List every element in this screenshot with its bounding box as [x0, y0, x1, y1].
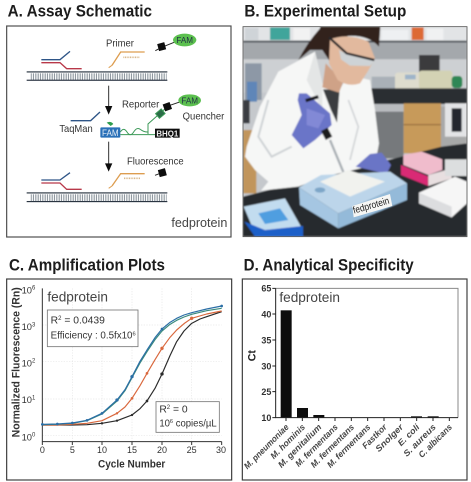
- y axis labels: 10: [22, 322, 32, 332]
- pipette: [306, 97, 345, 176]
- y axis labels: 10: [22, 395, 32, 405]
- x axis species labels: M. fermentans: [293, 422, 340, 469]
- copies box: 6: [170, 419, 173, 425]
- x axis species labels: Fastkor: [360, 422, 389, 451]
- right gloved hand: [356, 153, 391, 174]
- quencher fragment: [155, 168, 167, 177]
- face: [329, 36, 375, 85]
- y axis labels: 10: [22, 432, 32, 442]
- orange primer bottom: [109, 174, 145, 188]
- y axis labels: [261, 284, 271, 423]
- fluorescence label: Fluorescence: [127, 157, 184, 168]
- FAM block: FAM: [102, 128, 119, 138]
- panel A: assay schematic: [7, 1, 231, 237]
- y axis title: Normalized Fluorescence (Rn): [10, 287, 22, 437]
- x axis title: Cycle Number: [98, 459, 166, 471]
- y axis labels: 1: [32, 395, 36, 401]
- primer label: Primer: [106, 39, 135, 50]
- y axis labels: 6: [32, 286, 36, 292]
- panel C frame: [7, 279, 232, 480]
- y axis labels: 2: [32, 359, 36, 365]
- x axis labels: 10: [97, 445, 107, 455]
- x axis species labels: M. hominis: [268, 422, 307, 461]
- orange primer top: [109, 52, 145, 68]
- x axis species labels: M. genitalium: [276, 422, 324, 470]
- DNA strand bottom: [27, 192, 167, 202]
- panel D: analytical specificity: [242, 256, 467, 480]
- x axis labels: 0: [40, 445, 45, 455]
- panel D frame: [242, 279, 467, 480]
- y axis labels: 35: [261, 335, 271, 345]
- lab background: [243, 27, 467, 198]
- copies box: [156, 402, 219, 432]
- copies box: R: [159, 405, 167, 416]
- x axis labels: 15: [127, 445, 137, 455]
- panel C: amplification plots: [7, 256, 232, 480]
- blue tube rack: [244, 198, 303, 237]
- R squared and efficiency box: R: [51, 316, 58, 327]
- x axis species labels: C. albicans: [416, 422, 454, 460]
- curve markers: [41, 305, 223, 426]
- x axis labels: 5: [70, 445, 75, 455]
- axes and ticks: [272, 288, 458, 421]
- R squared and efficiency box: Efficiency : 0.5fx10: [51, 331, 132, 342]
- x axis species labels: M. fermentans: [308, 422, 356, 470]
- probe helix and reporter: [120, 101, 182, 135]
- lab coat: [245, 52, 379, 191]
- reporter label: Reporter: [122, 99, 160, 110]
- heading B: B. Experimental Setup: [244, 1, 406, 20]
- lab photograph illustration: [243, 27, 467, 237]
- x axis species labels: M. pneumoniae: [242, 422, 291, 471]
- amplification curves: [42, 306, 222, 425]
- ponytail and hair: [298, 27, 380, 62]
- reporter FAM tag: FAM: [181, 95, 198, 105]
- copies box: 2: [167, 405, 171, 411]
- top primer pair: [41, 51, 82, 69]
- y axis labels: 25: [261, 387, 271, 397]
- arrow down 1: [105, 86, 112, 115]
- blue foam box: [299, 172, 407, 213]
- y axis labels: 65: [261, 284, 271, 294]
- x axis species labels: M. fermentans: [325, 422, 373, 470]
- photo frame: [243, 27, 467, 237]
- y axis title: Ct: [246, 350, 258, 361]
- x axis species labels: E. coli: [395, 422, 422, 448]
- watermark D: fedprotein: [279, 290, 340, 305]
- bar chart: [281, 310, 439, 418]
- heading C: C. Amplification Plots: [9, 256, 165, 275]
- FAM probe top: [155, 34, 196, 51]
- x axis species labels: S. aureus: [401, 422, 438, 459]
- TaqMan probe line: [71, 112, 100, 121]
- R squared and efficiency box: [47, 310, 138, 347]
- y axis labels: 10: [22, 358, 32, 368]
- FAM block: [100, 122, 120, 138]
- reporter FAM tag: [163, 94, 201, 111]
- plot frame: [276, 288, 458, 418]
- x axis labels: 30: [216, 445, 226, 455]
- FAM probe top: FAM: [176, 35, 193, 45]
- y axis labels: 10: [261, 413, 271, 423]
- grid lines: [42, 288, 222, 442]
- quencher label: Quencher: [183, 111, 225, 122]
- panel B: experimental setup: [243, 1, 467, 237]
- fedprotein label on box: fedprotein: [352, 196, 391, 217]
- safety goggles: [329, 37, 374, 66]
- x axis labels: 20: [157, 445, 167, 455]
- x axis species labels: Snolger: [373, 422, 406, 454]
- panel A frame: [7, 26, 231, 237]
- y axis labels: 3: [32, 322, 36, 328]
- watermark C: fedprotein: [47, 290, 108, 305]
- axes: [42, 288, 222, 445]
- bench top: [243, 143, 467, 237]
- y axis labels: 30: [261, 361, 271, 371]
- TaqMan label: TaqMan: [59, 124, 93, 135]
- BHQ1 block: BHQ1: [156, 128, 178, 138]
- bottom primer pair: [41, 173, 82, 189]
- y axis labels: 10: [22, 285, 32, 295]
- neck: [322, 63, 343, 93]
- y axis labels: [22, 285, 36, 442]
- y axis labels: 40: [261, 309, 271, 319]
- heading A: A. Assay Schematic: [8, 1, 152, 20]
- R squared and efficiency box: 6: [132, 331, 136, 337]
- y axis labels: 0: [32, 433, 36, 439]
- white PCR plate: [320, 170, 385, 197]
- copies box: = 0: [170, 405, 188, 416]
- x axis labels: [40, 445, 226, 455]
- white tube rack: [419, 177, 467, 217]
- copies box: 10: [159, 418, 170, 429]
- heading D: D. Analytical Specificity: [244, 256, 414, 275]
- R squared and efficiency box: 2: [58, 316, 62, 322]
- x axis labels: 25: [187, 445, 197, 455]
- dark shirt: [323, 89, 340, 123]
- DNA strand top: [27, 71, 167, 81]
- x axis species labels: [242, 422, 454, 471]
- pink tube rack: [401, 152, 452, 186]
- watermark A: fedprotein: [171, 216, 227, 230]
- gloved hand: [292, 93, 332, 148]
- R squared and efficiency box: = 0.0439: [61, 316, 105, 327]
- copies box: copies/µL: [173, 418, 217, 429]
- arrow down 2: [105, 142, 112, 172]
